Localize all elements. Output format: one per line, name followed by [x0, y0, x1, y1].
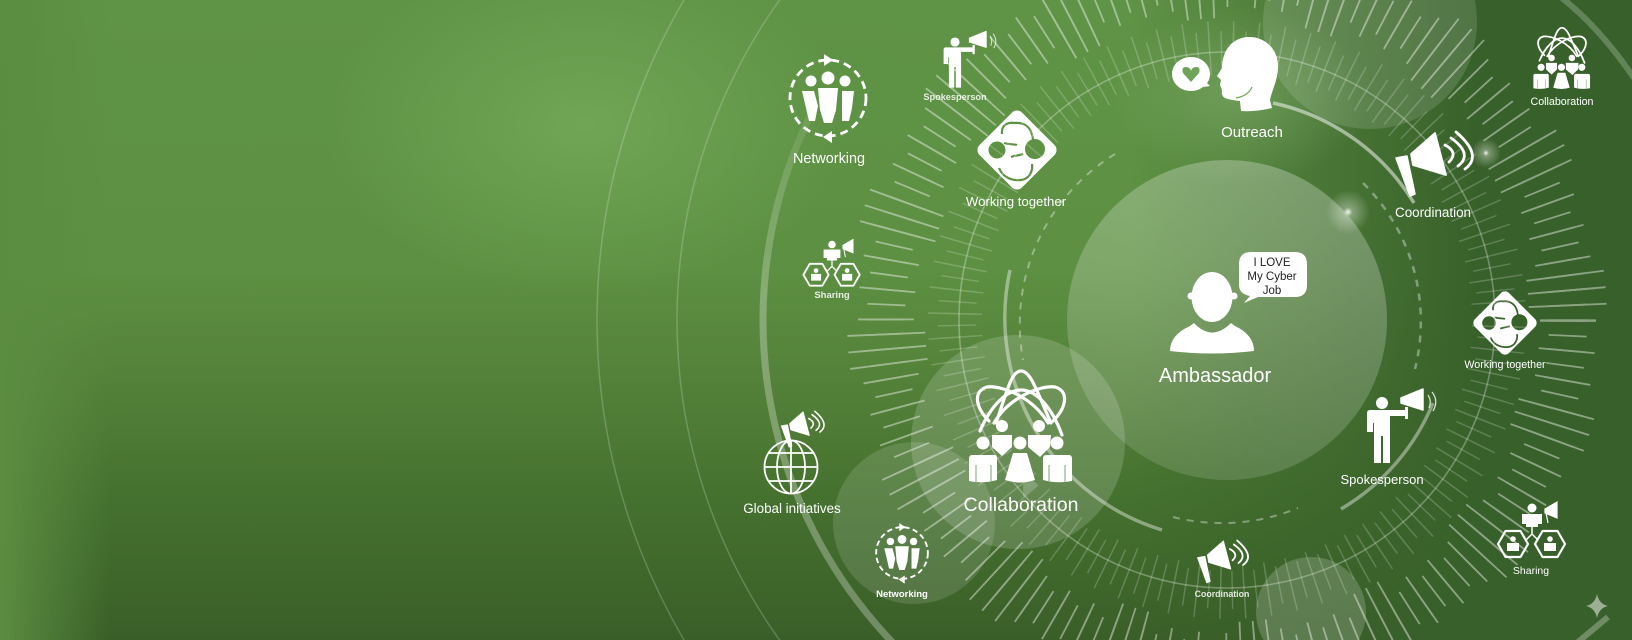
translucent circle: top — [1263, 0, 1477, 129]
sparkle near coordination — [1471, 138, 1501, 168]
speech bubble: I LOVE — [1253, 257, 1291, 269]
second thin ring — [677, 0, 1632, 640]
dashed ring right — [1363, 183, 1421, 369]
ambassador figure — [1170, 272, 1254, 354]
item: coordination small — [1195, 541, 1249, 599]
tick ring: outer radial ticks — [886, 0, 1568, 640]
dashed ring — [1020, 154, 1115, 360]
tick ring: inner faint ticks — [955, 48, 1499, 592]
sparkle on hub — [1326, 190, 1370, 234]
item: spokesperson small: Spokesperson — [923, 92, 987, 102]
item: sharing left: Sharing — [814, 290, 850, 301]
translucent circle: collaboration — [911, 335, 1125, 549]
translucent circle: bottom — [1256, 557, 1366, 640]
item: collaboration large — [964, 371, 1078, 516]
item: coordination — [1395, 132, 1472, 220]
item: collaboration large: Collaboration — [964, 494, 1078, 516]
item: spokesperson large: Spokesperson — [1340, 472, 1424, 487]
solid arc left — [1005, 270, 1162, 530]
item: collaboration small — [1531, 28, 1594, 108]
dashed ring bottom — [1173, 508, 1298, 523]
item: working together right — [1464, 289, 1546, 371]
item: working together right: Working together — [1464, 359, 1546, 371]
item: global initiatives — [743, 411, 841, 516]
ambassador label: Ambassador — [1159, 365, 1271, 387]
item: outreach: Outreach — [1221, 124, 1283, 141]
infographic: ambassador radial diagram — [596, 0, 1632, 640]
item: networking large — [790, 54, 866, 167]
thick ring arc left — [763, 0, 1632, 640]
item: sharing left — [803, 239, 860, 301]
thin ring through inner ticks — [959, 52, 1495, 588]
item: collaboration small: Collaboration — [1531, 96, 1594, 108]
thin outer ring — [597, 0, 1632, 640]
solid arc top right — [1273, 103, 1414, 203]
speech bubble — [1239, 252, 1307, 303]
item: sharing right: Sharing — [1513, 565, 1549, 577]
speech bubble: Job — [1263, 285, 1281, 297]
item: spokesperson small — [923, 31, 996, 102]
item: networking small: Networking — [876, 589, 928, 600]
item: working together large: Working together — [966, 194, 1067, 209]
thick ring arc bottom right — [1578, 617, 1608, 640]
translucent circle: small left — [833, 442, 995, 604]
item: coordination: Coordination — [1395, 205, 1471, 220]
decorative star mark — [1586, 594, 1608, 618]
item: networking large: Networking — [793, 151, 865, 167]
item: spokesperson large — [1340, 389, 1436, 487]
item: working together large — [966, 108, 1067, 209]
item: sharing right — [1498, 502, 1565, 577]
solid arc bottom right — [1341, 403, 1433, 509]
thick ring arc top right — [1562, 0, 1632, 78]
item: outreach — [1172, 37, 1283, 141]
central hub circle — [1067, 160, 1387, 480]
item: global initiatives: Global initiatives — [743, 501, 841, 516]
item: networking small — [876, 523, 928, 600]
speech bubble: My Cyber — [1247, 271, 1297, 283]
item: coordination small: Coordination — [1195, 589, 1249, 599]
